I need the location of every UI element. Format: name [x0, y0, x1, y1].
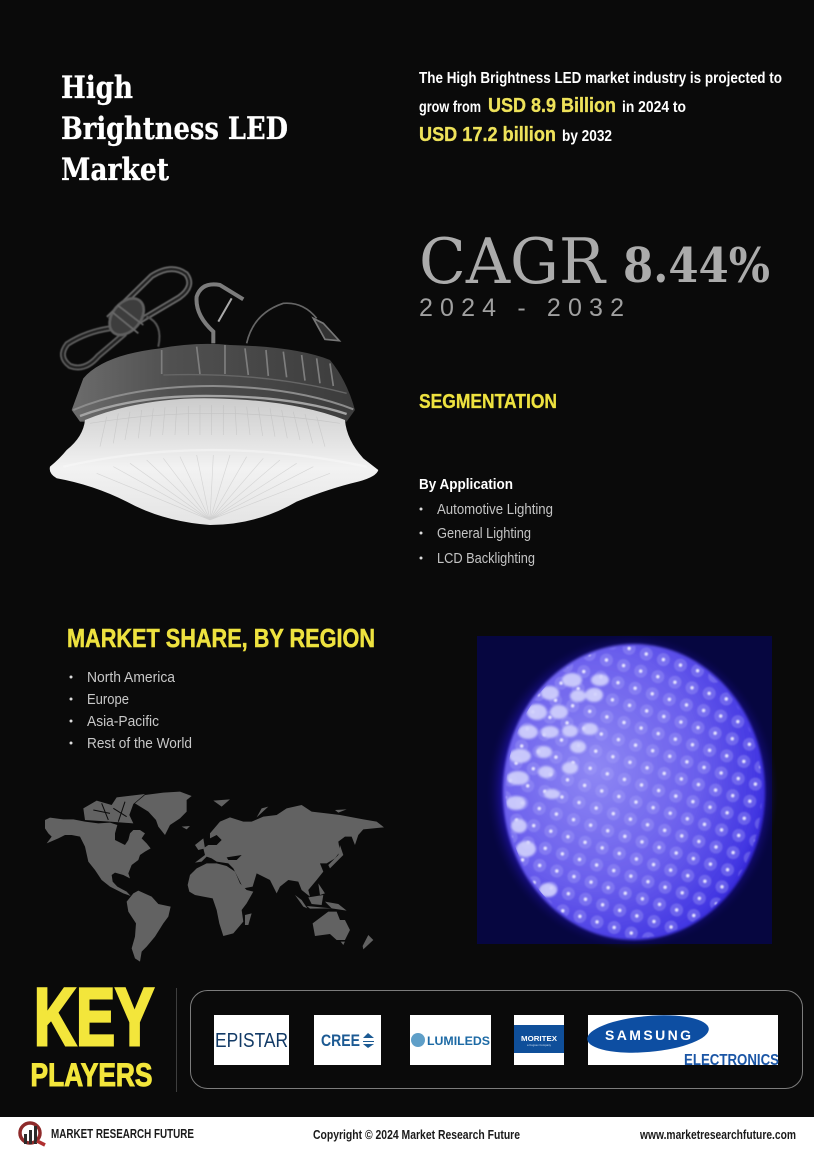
- key players heading: KEY: [34, 972, 154, 1063]
- CAGR figure: 2024 - 2032: [419, 294, 624, 322]
- glow disc: [486, 634, 778, 950]
- logo: Lumileds: [410, 1015, 491, 1065]
- disc of LEDs: [503, 644, 765, 940]
- market forecast text: grow from: [419, 99, 481, 116]
- divider: [176, 988, 177, 1092]
- segmentation list: [419, 477, 553, 567]
- segmentation list: LCD Backlighting: [437, 551, 535, 567]
- region list: Rest of the World: [87, 736, 192, 752]
- lamp hook: [197, 284, 339, 343]
- region list: [70, 670, 192, 752]
- bright LEDs on the left: [506, 673, 609, 897]
- logo: Lumileds: LUMILEDS: [427, 1034, 490, 1048]
- logo: Samsung Electronics: ELECTRONICS: [684, 1052, 779, 1069]
- key players panel: [190, 990, 802, 1088]
- segmentation list: Automotive Lighting: [437, 502, 553, 518]
- segmentation list: By Application: [419, 477, 513, 493]
- islands: [182, 799, 373, 949]
- region list: North America: [87, 670, 176, 686]
- title: Market: [61, 152, 170, 188]
- market forecast text: USD 17.2 billion: [419, 124, 556, 146]
- arctic islands: [83, 794, 145, 823]
- region list: Asia-Pacific: [87, 714, 159, 730]
- arctic channels: [93, 802, 127, 822]
- logo: Cree: [314, 1015, 381, 1065]
- segmentation list: General Lighting: [437, 526, 531, 542]
- logo: Moritex: MORITEX: [521, 1034, 557, 1043]
- black sea and caspian: [227, 855, 242, 860]
- lamp housing: [72, 344, 355, 422]
- title: Brightness LED: [61, 111, 288, 147]
- lamp glass shade: [50, 398, 378, 525]
- market forecast text: by 2032: [562, 128, 612, 145]
- lamp housing fins: [73, 345, 353, 416]
- logo: Cree: CREE: [321, 1031, 360, 1050]
- lamp shade ribs: [63, 405, 367, 520]
- CAGR figure: CAGR: [419, 225, 607, 298]
- photo: LED array: [477, 634, 778, 950]
- market forecast text: [419, 70, 782, 146]
- australia: [313, 912, 350, 940]
- title: [61, 70, 288, 188]
- LED dot matrix: [506, 646, 762, 938]
- logo: Moritex: a Cognex Company: [527, 1043, 551, 1047]
- illustration: high bay LED lamp: [50, 269, 378, 525]
- segmentation heading: SEGMENTATION: [419, 391, 557, 413]
- photo backdrop: [477, 636, 772, 944]
- logo: Epistar: EPISTAR: [215, 1030, 288, 1052]
- market share heading: MARKET SHARE, BY REGION: [67, 623, 375, 653]
- icon: market research future logo: [20, 1123, 45, 1145]
- CAGR figure: 8.44%: [623, 238, 770, 294]
- logo: Epistar: [214, 1015, 289, 1065]
- market forecast text: in 2024 to: [622, 99, 686, 116]
- key players heading: [30, 972, 154, 1093]
- region list: Europe: [87, 692, 129, 708]
- eurasia: [195, 805, 384, 897]
- footer bar: [0, 1117, 814, 1150]
- footer brand name: MARKET RESEARCH FUTURE: [51, 1127, 194, 1141]
- greenland: [135, 792, 192, 835]
- key players heading: PLAYERS: [30, 1057, 152, 1093]
- logo: Moritex: [514, 1015, 564, 1065]
- logo: Samsung Electronics: [586, 1011, 779, 1069]
- north america: [45, 818, 151, 896]
- title: High: [61, 70, 133, 106]
- CAGR figure: [419, 225, 770, 322]
- world map: [45, 792, 384, 962]
- south america: [127, 891, 171, 962]
- logo: Samsung Electronics: SAMSUNG: [605, 1027, 691, 1043]
- footer copyright: Copyright © 2024 Market Research Future: [313, 1128, 520, 1142]
- africa: [188, 863, 253, 936]
- market forecast text: USD 8.9 Billion: [488, 95, 616, 117]
- lamp power cord: [63, 269, 189, 367]
